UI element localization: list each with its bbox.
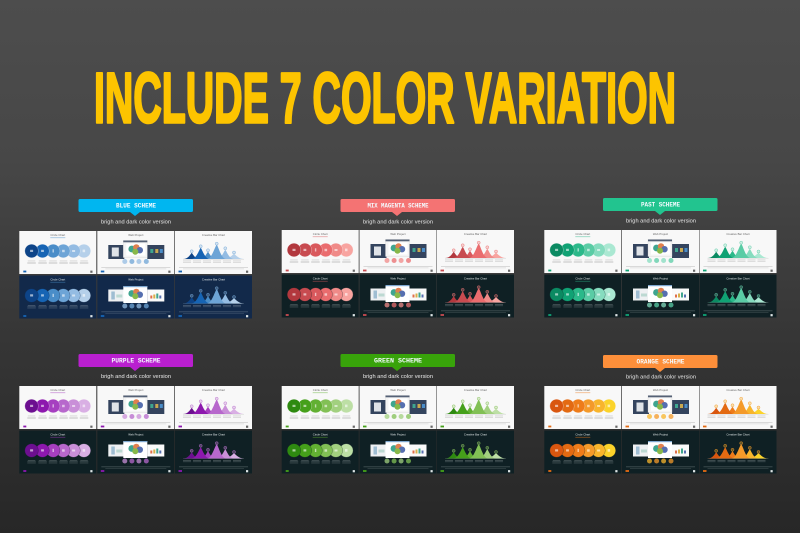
thumbnails: orange (544, 386, 776, 474)
banner: past scheme (603, 198, 718, 215)
thumbnails: orange: Circle Chart (575, 432, 590, 436)
thumbnails: mix magenta: Creative Bar Chart (464, 276, 487, 280)
thumbnails: mix magenta: Circle Chart (313, 276, 328, 280)
thumbnails: past (544, 230, 776, 318)
thumbnails: green: Web Project (390, 432, 406, 436)
thumbnails: blue: Creative Bar Chart (202, 233, 225, 237)
banner: green scheme (340, 354, 455, 371)
banner: mix magenta scheme: MIX MAGENTA SCHEME (368, 202, 429, 210)
banner: orange scheme (603, 355, 718, 372)
banner: past scheme: PAST SCHEME (641, 202, 680, 208)
thumbnails: past: Web Project (653, 232, 668, 236)
subtitle: blue: brigh and dark color version (101, 220, 171, 226)
banner: mix magenta scheme (340, 199, 455, 216)
thumbnails: green: Circle Chart (313, 388, 328, 392)
panel: green scheme (282, 354, 514, 474)
panel: orange scheme (544, 355, 776, 474)
subtitle: mix magenta: brigh and dark color version (363, 220, 433, 226)
thumbnails: blue (19, 231, 252, 318)
subtitle: purple: brigh and dark color version (101, 374, 171, 380)
thumbnails: mix magenta: Web Project (390, 276, 406, 280)
thumbnails: mix magenta: Circle Chart (313, 232, 328, 236)
thumbnails: blue: Web Project (128, 233, 144, 237)
thumbnails: past: Creative Bar Chart (726, 276, 750, 280)
thumbnails: purple: Circle Chart (50, 388, 65, 392)
thumbnails: past: Web Project (653, 276, 668, 280)
subtitle: past: brigh and dark color version (626, 218, 696, 224)
panel: past scheme (544, 198, 776, 318)
thumbnails: orange: Creative Bar Chart (726, 388, 750, 392)
thumbnails: orange: Web Project (653, 432, 668, 436)
thumbnails: purple: Creative Bar Chart (202, 388, 225, 392)
thumbnails: past: Creative Bar Chart (726, 232, 750, 236)
thumbnails: purple: Web Project (128, 432, 144, 436)
thumbnails: blue: Creative Bar Chart (202, 278, 225, 282)
thumbnails: blue: Web Project (128, 278, 144, 282)
thumbnails: green (282, 386, 514, 474)
panel: blue scheme (19, 199, 252, 318)
thumbnails: blue: Circle Chart (50, 278, 65, 282)
banner: blue scheme: BLUE SCHEME (116, 202, 156, 210)
thumbnails: past: Circle Chart (575, 276, 590, 280)
thumbnails: purple: Creative Bar Chart (202, 432, 225, 436)
banner: blue scheme (78, 199, 193, 216)
banner: purple scheme (78, 354, 193, 371)
thumbnails: blue: Circle Chart (50, 233, 65, 237)
panel: purple scheme (19, 354, 252, 474)
thumbnails: purple: Circle Chart (50, 432, 65, 436)
thumbnails: green: Circle Chart (313, 432, 328, 436)
thumbnails: purple: Web Project (128, 388, 144, 392)
banner: green scheme: GREEN SCHEME (374, 358, 422, 364)
thumbnails: green: Creative Bar Chart (464, 388, 487, 392)
thumbnails: orange: Web Project (653, 388, 668, 392)
subtitle: orange: brigh and dark color version (626, 374, 696, 380)
thumbnails: past: Circle Chart (575, 232, 590, 236)
thumbnails: purple (19, 386, 252, 474)
subtitle: green: brigh and dark color version (363, 374, 433, 380)
thumbnails: orange: Circle Chart (575, 388, 590, 392)
thumbnails: mix magenta (282, 230, 514, 318)
thumbnails: green: Creative Bar Chart (464, 432, 487, 436)
panel: mix magenta scheme (282, 199, 514, 318)
thumbnails: orange: Creative Bar Chart (726, 432, 750, 436)
thumbnails: mix magenta: Web Project (390, 232, 406, 236)
thumbnails: green: Web Project (390, 388, 406, 392)
thumbnails: mix magenta: Creative Bar Chart (464, 232, 487, 236)
banner: orange scheme: ORANGE SCHEME (636, 358, 685, 366)
banner: purple scheme: PURPLE SCHEME (112, 358, 161, 364)
